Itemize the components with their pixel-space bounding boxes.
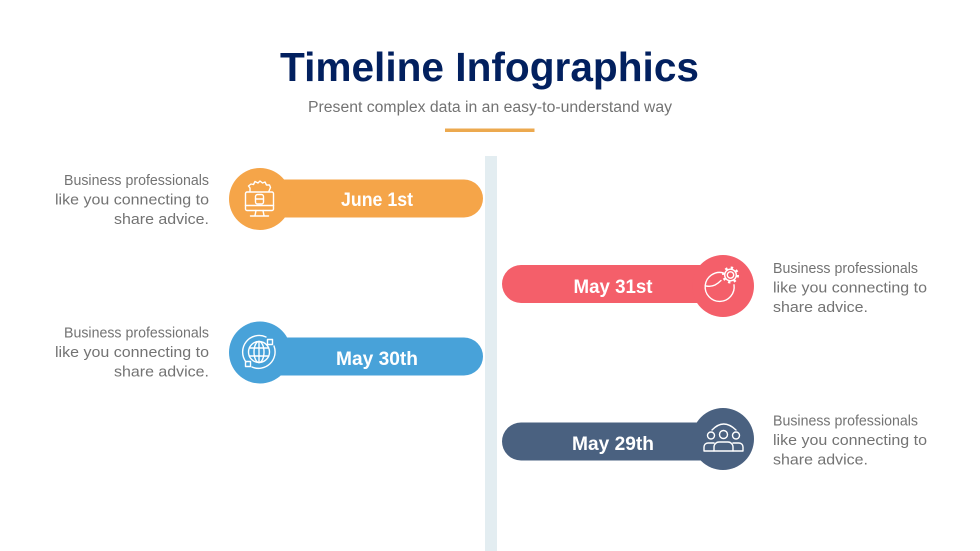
description: May 30th xyxy=(55,326,209,380)
description: May 29th: share advice. xyxy=(773,452,868,468)
description: May 29th xyxy=(773,414,927,468)
icon: group of people xyxy=(704,424,743,451)
timeline axis xyxy=(485,156,497,551)
milestone: June 1st xyxy=(55,168,483,230)
pill: May 29th xyxy=(502,408,754,470)
milestone: May 29th xyxy=(502,408,927,470)
pill: June 1st xyxy=(229,168,483,230)
pill: May 31st xyxy=(502,255,754,317)
accent rule xyxy=(445,128,534,132)
description: May 31st: like you connecting to xyxy=(773,280,927,296)
description: May 30th: like you connecting to xyxy=(55,345,209,361)
milestone: May 30th xyxy=(55,322,483,384)
description: May 30th: Business professionals xyxy=(64,326,209,342)
description: May 31st xyxy=(773,261,927,316)
description: May 31st: Business professionals xyxy=(773,261,918,277)
icon: globe with nodes xyxy=(243,335,275,368)
title: Timeline Infographics xyxy=(280,44,699,90)
pill: June 1st: June 1st xyxy=(341,190,414,211)
description: June 1st xyxy=(55,173,209,228)
description: June 1st: like you connecting to xyxy=(55,192,209,208)
description: June 1st: share advice. xyxy=(114,212,209,228)
pill: May 29th: May 29th xyxy=(572,434,654,455)
pill: May 31st: May 31st xyxy=(574,277,653,298)
description: May 30th: share advice. xyxy=(114,364,209,380)
pill: May 30th xyxy=(229,322,483,384)
description: May 29th: Business professionals xyxy=(773,414,918,430)
description: June 1st: Business professionals xyxy=(64,173,209,189)
icon: bomb with gear xyxy=(705,268,738,301)
milestone: May 31st xyxy=(502,255,927,317)
icon: monitor with gear xyxy=(246,181,274,216)
description: May 31st: share advice. xyxy=(773,300,868,316)
description: May 29th: like you connecting to xyxy=(773,433,927,449)
pill: May 30th: May 30th xyxy=(336,349,418,370)
subtitle: Present complex data in an easy-to-understand way xyxy=(308,99,672,116)
